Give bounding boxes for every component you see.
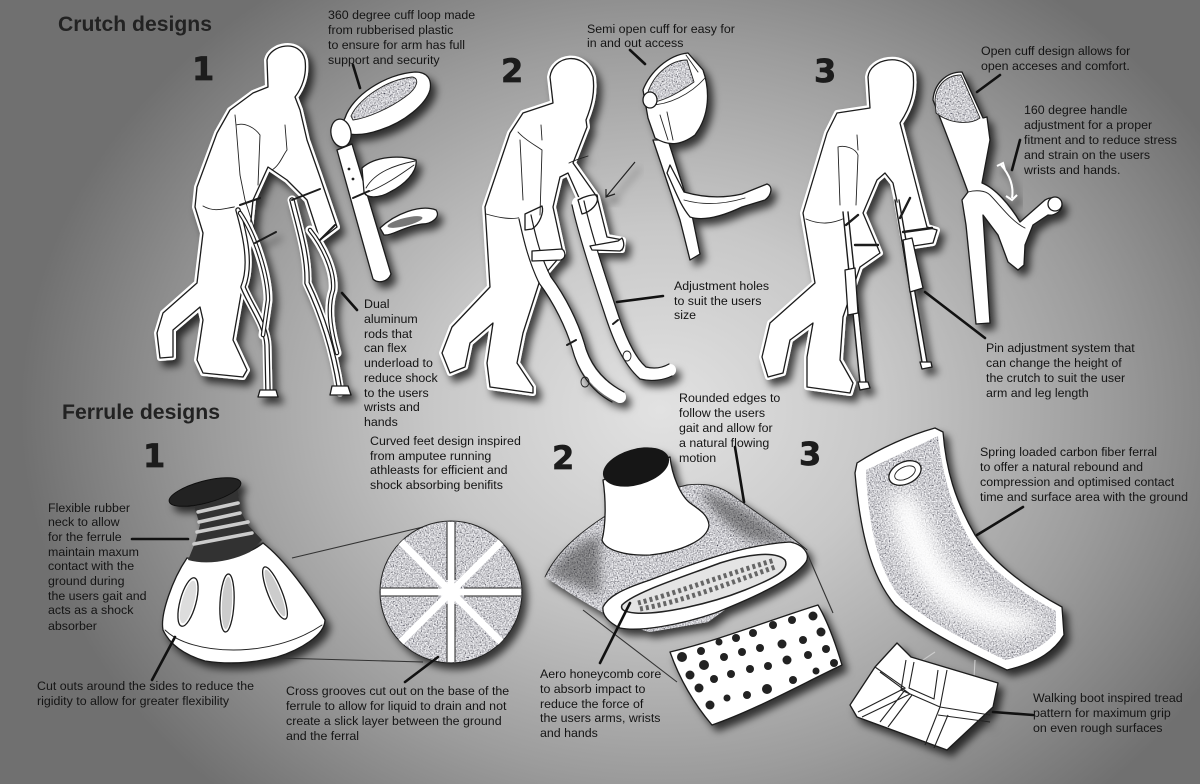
callout: flexible neck: for the ferrule xyxy=(48,530,122,544)
crutch 2 exploded view xyxy=(643,53,771,260)
callout: open cuff: Open cuff design allows for xyxy=(981,44,1130,58)
arrow: handle rotation xyxy=(997,163,1017,200)
callout: dual rods: rods that xyxy=(364,327,413,341)
leader lines xyxy=(132,50,1033,715)
number: crutch 2: 2 xyxy=(501,52,523,90)
ferrule 1: rubber neck ferrule xyxy=(163,472,325,663)
callout: rounded edges: follow the users xyxy=(679,406,765,420)
callout: 360 degree cuff: support and security xyxy=(328,53,440,67)
ferrule 1 base detail: cross grooves xyxy=(277,521,522,663)
callout: dual rods: wrists and xyxy=(363,400,420,414)
callout: boot tread: on even rough surfaces xyxy=(1033,721,1162,735)
callout: curved feet: athleasts for efficient and xyxy=(370,463,508,477)
callout: flexible neck: the users gait and xyxy=(48,589,147,603)
callout: 360 degree cuff: from rubberised plastic xyxy=(328,23,453,37)
figure 2: person on curved foot crutches xyxy=(442,59,672,402)
callout: flexible neck: Flexible rubber xyxy=(48,501,130,515)
callout: semi open cuff: in and out access xyxy=(587,36,683,50)
callout: honeycomb core: reduce the force of xyxy=(540,697,644,711)
crutch 1 exploded view xyxy=(329,72,437,282)
callout: semi open cuff: Semi open cuff for easy for xyxy=(587,22,735,36)
ferrule 3: carbon fibre spring ferrule xyxy=(855,428,1064,670)
callout: pin adjustment: the crutch to suit the user xyxy=(986,371,1125,385)
callout: handle adjustment: fitment and to reduce stress xyxy=(1024,133,1177,147)
callout: curved feet: shock absorbing benifits xyxy=(370,478,503,492)
callout: adjustment holes: Adjustment holes xyxy=(674,279,769,293)
callout: open cuff: open acceses and comfort. xyxy=(981,59,1130,73)
callout: honeycomb core: the users arms, wrists xyxy=(540,711,660,725)
callout: handle adjustment: 160 degree handle xyxy=(1024,103,1127,117)
callout: pin adjustment: arm and leg length xyxy=(986,386,1089,400)
callout: flexible neck: ground during xyxy=(48,574,125,588)
callout: flexible neck: maintain maxum xyxy=(48,545,139,559)
callout: dual rods: hands xyxy=(364,415,398,429)
callout: honeycomb core: to absorb impact to xyxy=(540,682,645,696)
number: crutch 3: 3 xyxy=(814,52,836,90)
number: crutch 1: 1 xyxy=(192,50,214,88)
arrow: pointing at cuff xyxy=(606,162,635,197)
callout: cross grooves: Cross grooves cut out on the base of the xyxy=(286,684,509,698)
callout: adjustment holes: to suit the users xyxy=(674,294,761,308)
callout: spring loaded: compression and optimised contact xyxy=(980,475,1175,489)
callout: honeycomb core: and hands xyxy=(540,726,598,740)
callout: 360 degree cuff: to ensure for arm has full xyxy=(328,38,465,52)
callout: handle adjustment: wrists and hands. xyxy=(1023,163,1120,177)
callout: cut outs: Cut outs around the sides to reduce the xyxy=(37,679,254,693)
callout: flexible neck: neck to allow xyxy=(48,515,120,529)
number: ferrule 2: 2 xyxy=(552,439,574,477)
callout: cut outs: rigidity to allow for greater flexibility xyxy=(37,694,230,708)
callout: dual rods: underload to xyxy=(364,356,433,370)
callout: spring loaded: to offer a natural rebound and xyxy=(980,460,1143,474)
callout: handle adjustment: adjustment for a proper xyxy=(1024,118,1152,132)
figure 1: person on dual rod crutches xyxy=(157,46,351,397)
callout: dual rods: to the users xyxy=(364,386,429,400)
number: ferrule 3: 3 xyxy=(799,435,821,473)
callout: handle adjustment: and strain on the users xyxy=(1024,148,1150,162)
callout: dual rods: reduce shock xyxy=(364,371,439,385)
ferrule 3: boot tread pad xyxy=(850,643,998,750)
heading: crutch designs: Crutch designs xyxy=(58,13,212,36)
callout: spring loaded: Spring loaded carbon fiber ferral xyxy=(980,445,1157,459)
callout: curved feet: Curved feet design inspired xyxy=(370,434,521,448)
callout: honeycomb core: Aero honeycomb core xyxy=(540,667,661,681)
callout: dual rods: aluminum xyxy=(364,312,418,326)
callout: boot tread: pattern for maximum grip xyxy=(1033,706,1171,720)
callout: spring loaded: time and surface area with the ground xyxy=(980,490,1188,504)
callout: rounded edges: Rounded edges to xyxy=(679,391,780,405)
callout: rounded edges: gait and allow for xyxy=(679,421,773,435)
callout: pin adjustment: Pin adjustment system that xyxy=(986,341,1135,355)
callout: cross grooves: create a slick layer between the ground xyxy=(286,714,502,728)
callout: pin adjustment: can change the height of xyxy=(986,356,1122,370)
callout: rounded edges: a natural flowing xyxy=(679,436,769,450)
callout: 360 degree cuff: 360 degree cuff loop made xyxy=(328,8,475,22)
callout: flexible neck: acts as a shock xyxy=(48,603,134,617)
callout: flexible neck: contact with the xyxy=(48,559,134,573)
callout: adjustment holes: size xyxy=(674,308,696,322)
callout: cross grooves: and the ferral xyxy=(286,729,359,743)
ferrule 2: honeycomb ferrule xyxy=(545,440,807,632)
number: ferrule 1: 1 xyxy=(143,437,165,475)
ferrule 2 tread detail: dotted pad xyxy=(583,553,842,725)
callout: boot tread: Walking boot inspired tread xyxy=(1033,691,1183,705)
callout: dual rods: can flex xyxy=(364,341,408,355)
crutch 3 exploded view xyxy=(933,72,1062,324)
heading: ferrule designs: Ferrule designs xyxy=(62,401,220,424)
callout: rounded edges: motion xyxy=(679,451,716,465)
callout: dual rods: Dual xyxy=(364,297,389,311)
figure 3: person on pin adjustment crutches xyxy=(762,60,937,393)
callout: cross grooves: ferrule to allow for liquid to drain and not xyxy=(286,699,507,713)
callout: flexible neck: absorber xyxy=(48,619,97,633)
callout: curved feet: from amputee running xyxy=(370,449,491,463)
